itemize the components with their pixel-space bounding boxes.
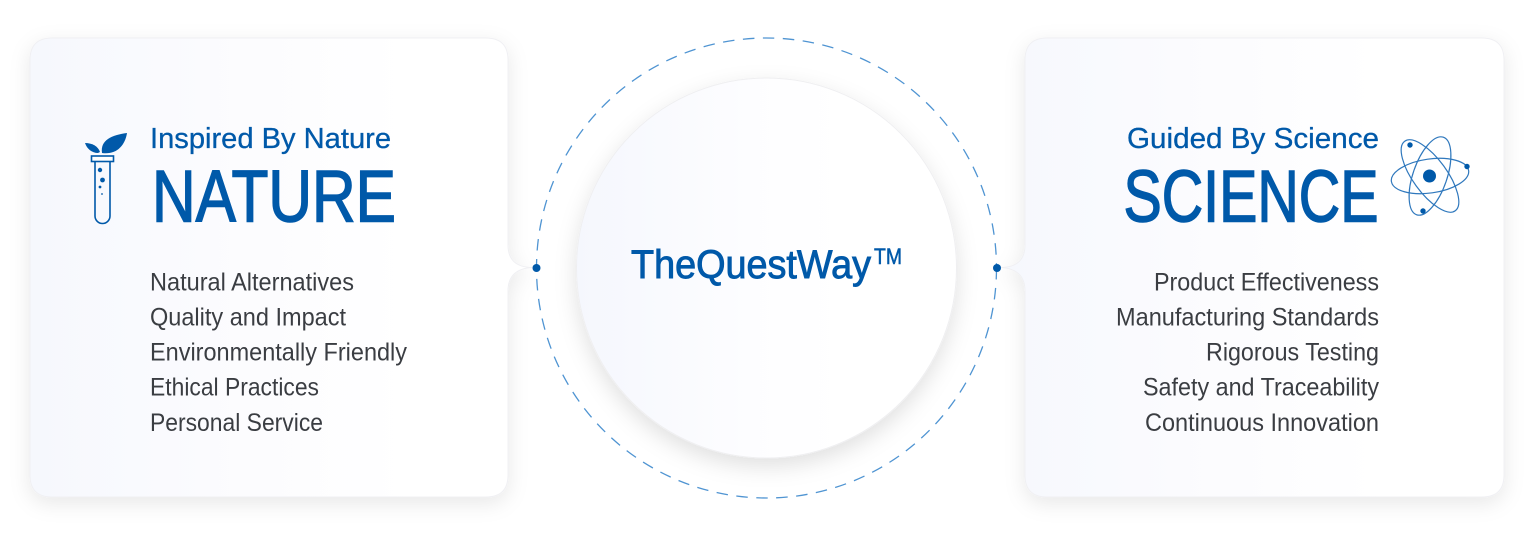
list: science items: Rigorous Testing (1206, 338, 1379, 366)
heading: inspired by nature: Inspired By Nature (150, 123, 391, 155)
list: science items: Safety and Traceability (1143, 374, 1379, 402)
connector dot: right (993, 264, 1001, 272)
list: science items: Product Effectiveness (1154, 268, 1379, 296)
list: nature items (150, 268, 407, 437)
icon: test tube with leaves (85, 133, 127, 224)
list: nature items: Natural Alternatives (150, 268, 354, 296)
list: science items: Manufacturing Standards (1116, 304, 1379, 332)
title: TheQuestWay: TheQuestWay (631, 243, 871, 287)
central circle (576, 78, 956, 458)
list: nature items: Personal Service (150, 409, 323, 437)
heading: guided by science: Guided By Science (1127, 123, 1379, 155)
list: nature items: Environmentally Friendly (150, 338, 407, 366)
list: science items (1116, 268, 1379, 437)
list: nature items: Ethical Practices (150, 374, 319, 402)
list: science items: Continuous Innovation (1145, 409, 1379, 437)
heading: NATURE: NATURE (152, 154, 396, 238)
list: nature items: Quality and Impact (150, 304, 346, 332)
dashed ring (536, 38, 996, 498)
connector dot: left (532, 264, 540, 272)
icon: atom (1389, 131, 1471, 221)
heading: SCIENCE: SCIENCE (1124, 154, 1378, 238)
panel: science (1001, 38, 1504, 497)
trademark: TM (874, 244, 902, 269)
panel: nature (30, 38, 532, 497)
